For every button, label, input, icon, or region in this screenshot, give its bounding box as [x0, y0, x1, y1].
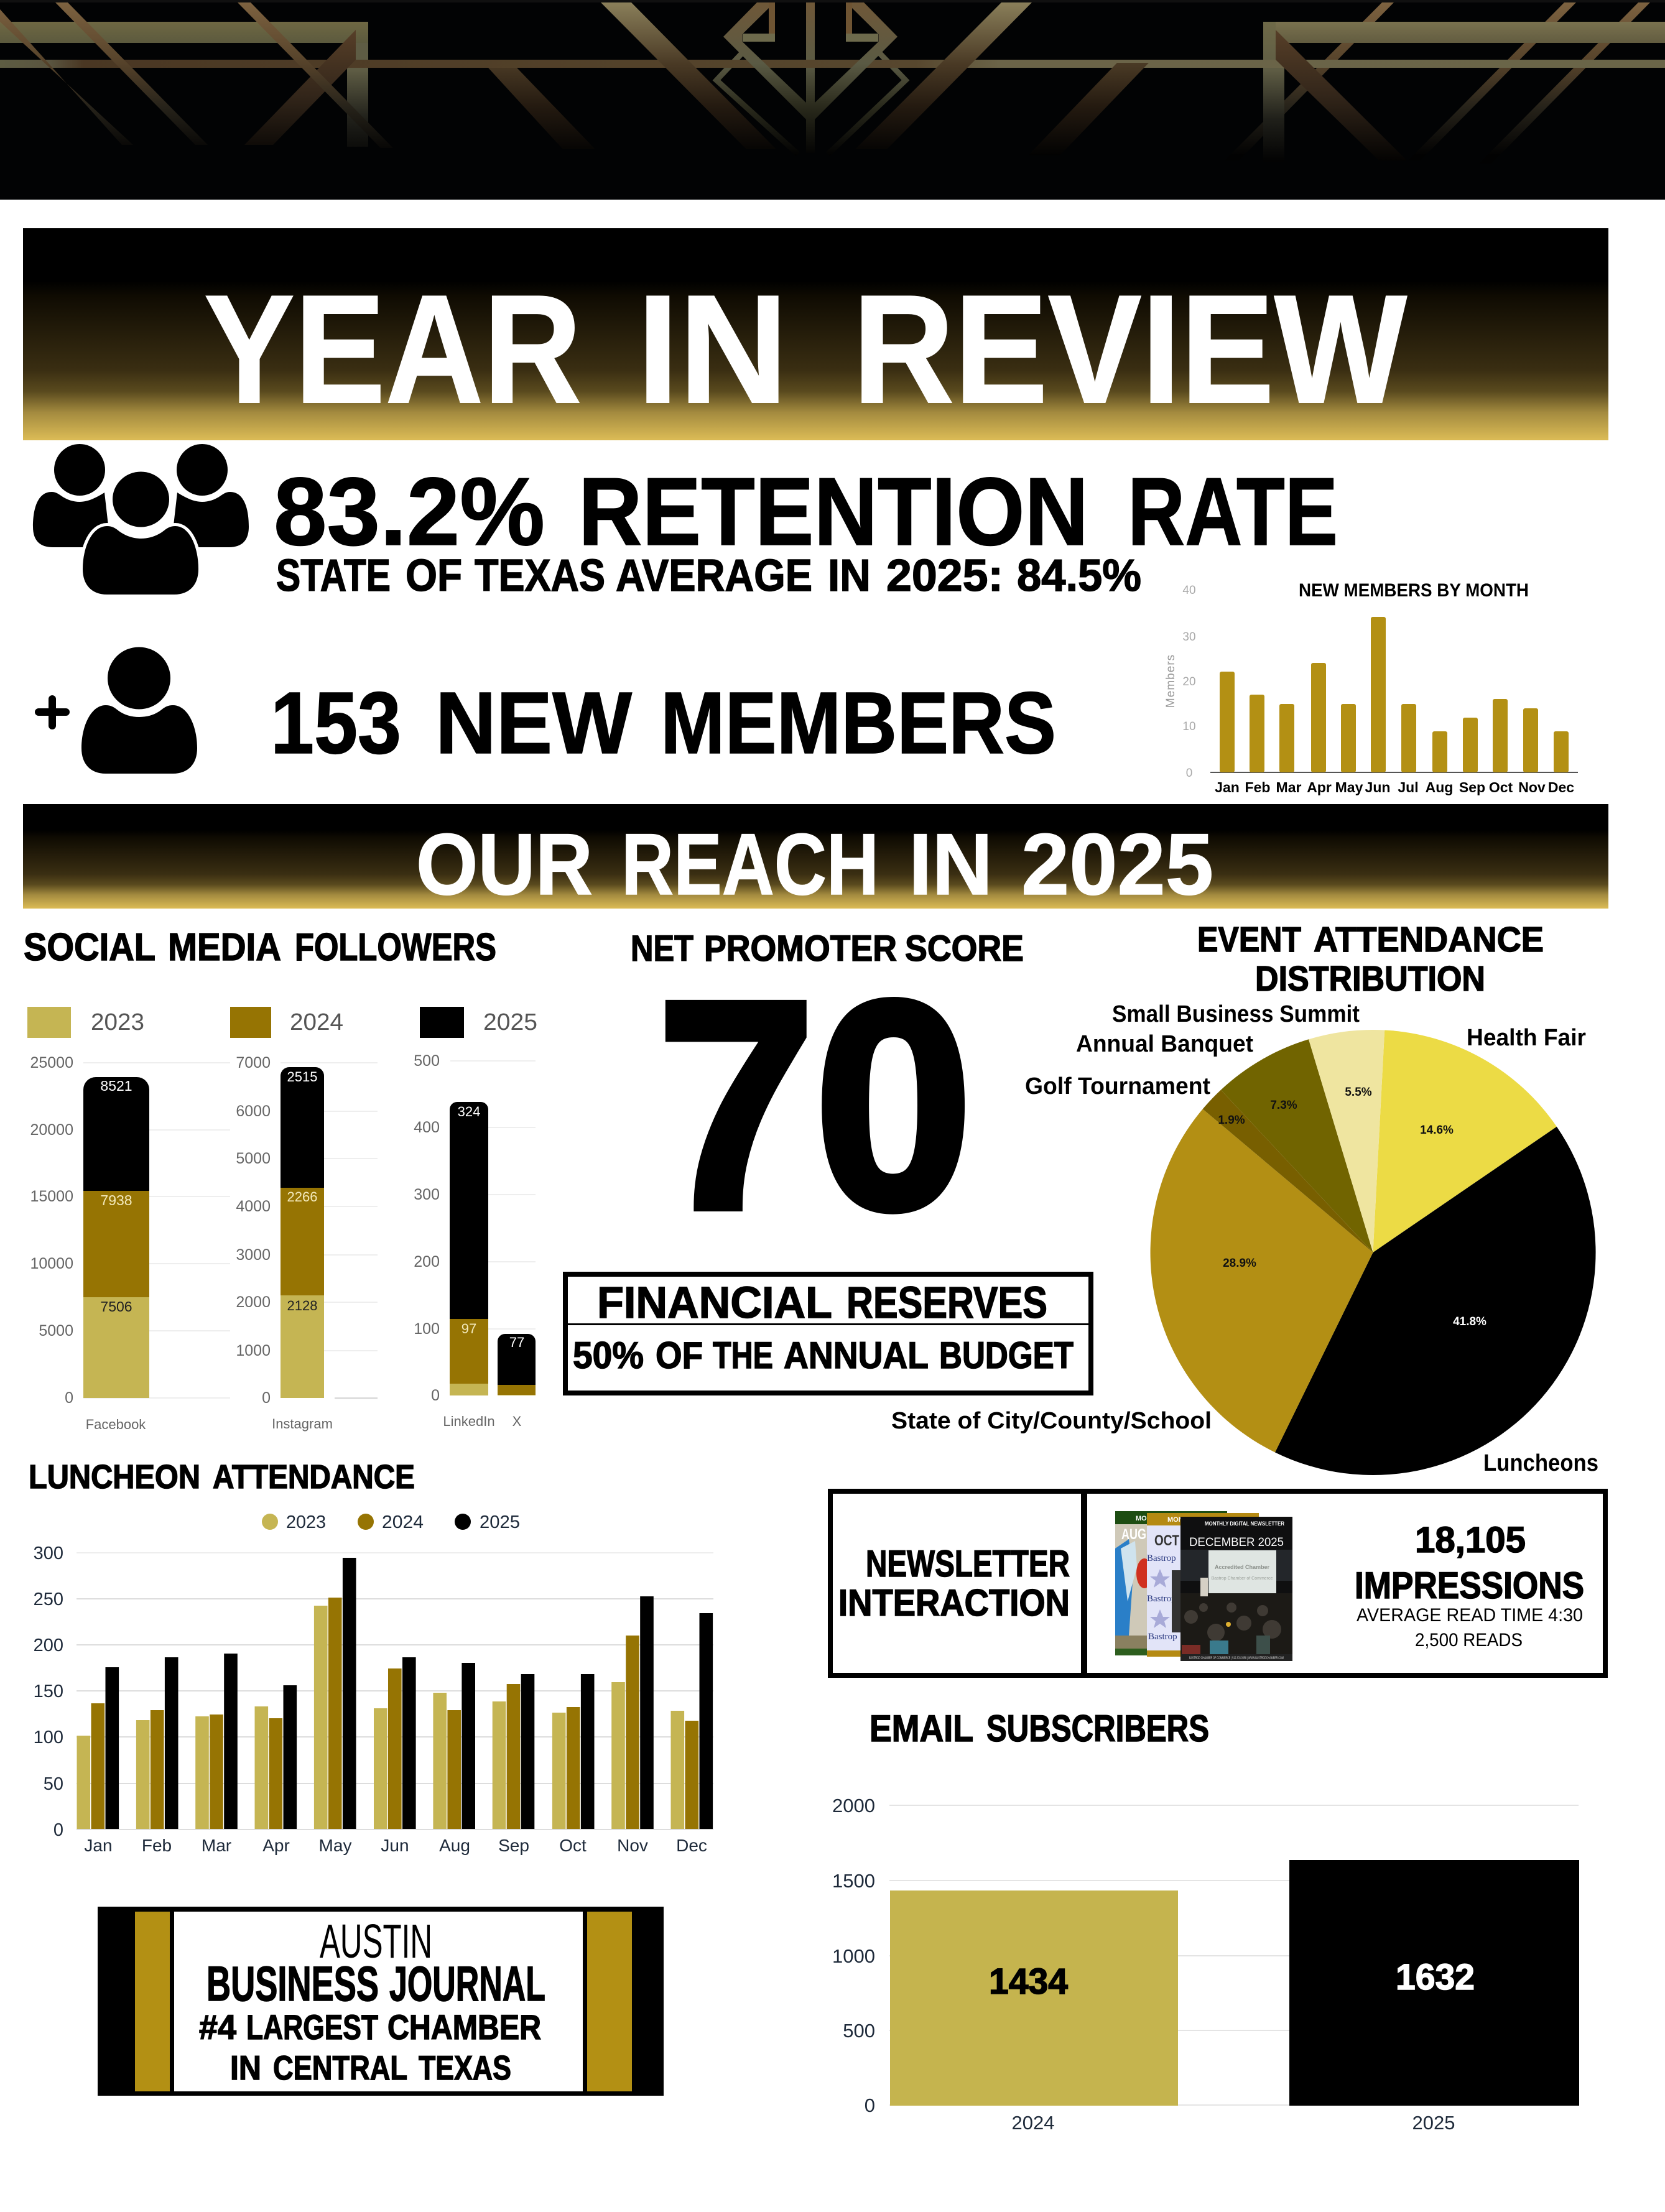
heading: luncheon attendance — [29, 1458, 415, 1496]
bar chart: new members by month: Feb — [1245, 779, 1270, 795]
impressions stat — [1355, 1520, 1584, 1650]
retention rate stat: RETENTION — [578, 458, 1088, 565]
bar chart: luncheon attendance: Jan — [84, 1836, 113, 1855]
bar chart: new members by month: Apr — [1307, 779, 1332, 795]
stacked bar chart: instagram: 2515 — [287, 1069, 317, 1085]
heading: net promoter score: NET — [631, 928, 693, 969]
bar chart: luncheon attendance: May — [319, 1836, 351, 1855]
bar chart: new members by month: 0 — [1186, 767, 1192, 780]
impressions stat: 2,500 READS — [1415, 1630, 1523, 1650]
big number: 70: 70 — [657, 941, 972, 1270]
stacked bar chart: instagram: 5000 — [236, 1150, 271, 1167]
title band: year in review: IN — [637, 262, 788, 435]
panel: financial reserves: BUDGET — [939, 1335, 1074, 1376]
bar chart: email subscribers: 1434 — [989, 1961, 1068, 2002]
bar chart: luncheon attendance: Oct — [559, 1836, 587, 1855]
new members stat — [271, 673, 1056, 772]
retention rate stat: 83.2% — [274, 458, 545, 565]
icon: three members — [33, 444, 249, 595]
bar chart: new members by month: Jan — [1215, 779, 1240, 795]
bar chart: luncheon attendance: 200 — [34, 1636, 63, 1655]
bar chart: new members by month: 40 — [1182, 584, 1196, 597]
panel: financial reserves: ANNUAL — [784, 1335, 929, 1376]
pie chart: event attendance: Golf Tournament — [1025, 1073, 1210, 1099]
bar chart: email subscribers: 2000 — [832, 1795, 875, 1816]
stacked bar chart: facebook: 20000 — [30, 1121, 73, 1139]
pie chart: event attendance: Health Fair — [1467, 1025, 1586, 1051]
newsletter covers: AUG — [1121, 1526, 1146, 1543]
texas average note — [276, 551, 1141, 601]
stacked bar chart: linkedin and x: 97 — [461, 1321, 476, 1336]
section band: our reach in 2025 — [23, 804, 1608, 913]
bar chart: new members by month: 10 — [1182, 720, 1196, 733]
stacked bar chart: linkedin and x: X — [512, 1414, 522, 1429]
stacked bar chart: instagram: 4000 — [236, 1198, 271, 1215]
newsletter covers: BASTROP CHAMBER OF COMMERCE | 512.303.0558 | WWW.BASTROPCHAMBER.COM — [1189, 1657, 1284, 1660]
chart title: NEW MEMBERS BY MONTH — [1299, 580, 1529, 601]
newsletter label — [838, 1543, 1070, 1624]
legend: 2025 — [480, 1512, 520, 1532]
newsletter covers: Bastrop — [1147, 1553, 1176, 1563]
newsletter covers: Bastrop Chamber of Commerce — [1212, 1576, 1273, 1581]
legend: 2023 — [286, 1512, 326, 1532]
bar chart: new members by month: Nov — [1518, 779, 1546, 795]
impressions stat: AVERAGE READ TIME 4:30 — [1357, 1605, 1583, 1626]
heading: net promoter score: SCORE — [905, 928, 1024, 969]
retention rate stat: RATE — [1128, 458, 1338, 565]
bar chart: email subscribers: 2025 — [1412, 2112, 1455, 2134]
stacked bar chart: instagram: 1000 — [236, 1342, 271, 1359]
heading: event attendance distribution — [1197, 920, 1544, 999]
callout: austin business journal: CENTRAL — [273, 2048, 407, 2087]
callout: austin business journal: JOURNAL — [389, 1956, 545, 2011]
bar chart: luncheon attendance: 150 — [34, 1682, 63, 1701]
stacked bar chart: linkedin and x: LinkedIn — [443, 1414, 495, 1429]
stacked bar chart: facebook: 0 — [65, 1389, 73, 1407]
bar chart: luncheon attendance: Nov — [617, 1836, 648, 1855]
newsletter label: NEWSLETTER — [866, 1543, 1070, 1585]
newsletter covers — [1115, 1511, 1292, 1661]
newsletter covers: Bastrop — [1147, 1594, 1176, 1604]
newsletter covers: OCT — [1154, 1532, 1179, 1549]
newsletter covers: DECEMBER 2025 — [1189, 1536, 1284, 1549]
bar chart: new members by month: Jul — [1398, 779, 1419, 795]
bar chart: email subscribers: 500 — [843, 2020, 875, 2042]
stacked bar chart: facebook: 7506 — [100, 1298, 132, 1315]
stacked bar chart: linkedin and x: 100 — [414, 1320, 440, 1338]
newsletter label: INTERACTION — [838, 1582, 1070, 1624]
bar chart: email subscribers: 1000 — [832, 1945, 875, 1967]
new members stat: MEMBERS — [661, 673, 1056, 772]
section band: our reach in 2025: OUR — [416, 815, 593, 913]
bar chart: new members by month: Members — [1164, 654, 1177, 708]
newsletter covers: Bastrop — [1148, 1632, 1177, 1642]
panel: financial reserves: RESERVES — [846, 1279, 1047, 1328]
retention rate stat — [274, 458, 1338, 565]
callout: austin business journal: IN — [230, 2048, 261, 2087]
stacked bar chart: instagram: Instagram — [272, 1416, 333, 1432]
bar chart: luncheon attendance: Sep — [498, 1836, 529, 1855]
stacked bar chart: linkedin and x: 300 — [414, 1186, 440, 1203]
impressions stat: 18,105 — [1415, 1520, 1526, 1560]
bar chart: luncheon attendance: 100 — [34, 1728, 63, 1747]
header banner: art deco lines — [0, 0, 1665, 200]
bar chart: luncheon attendance: Mar — [202, 1836, 231, 1855]
legend: social media years — [27, 1007, 537, 1038]
bar chart: luncheon attendance: Dec — [676, 1836, 707, 1855]
bar chart: email subscribers: 1500 — [832, 1870, 875, 1892]
panel: financial reserves — [565, 1274, 1091, 1393]
bar chart: email subscribers: 2024 — [1012, 2112, 1054, 2134]
stacked bar chart: linkedin and x — [414, 1052, 536, 1429]
stacked bar chart: instagram: 2000 — [236, 1293, 271, 1311]
heading: event attendance distribution: EVENT — [1197, 920, 1301, 960]
panel: financial reserves: THE — [713, 1335, 773, 1376]
bar chart: new members by month — [1164, 580, 1578, 795]
title band: year in review: REVIEW — [853, 262, 1407, 435]
impressions stat: IMPRESSIONS — [1355, 1565, 1584, 1606]
bar chart: email subscribers: 0 — [865, 2094, 875, 2116]
bar chart: email subscribers — [832, 1795, 1579, 2134]
heading: event attendance distribution: DISTRIBUTION — [1255, 959, 1485, 999]
bar chart: luncheon attendance: 0 — [53, 1820, 63, 1840]
heading: luncheon attendance: LUNCHEON — [29, 1458, 200, 1496]
callout: austin business journal: LARGEST — [246, 2007, 378, 2047]
callout: austin business journal: #4 — [199, 2007, 236, 2047]
pie chart: event attendance: Luncheons — [1483, 1450, 1598, 1476]
pie chart: event attendance: Annual Banquet — [1076, 1031, 1253, 1057]
bar chart: luncheon attendance: 250 — [34, 1590, 63, 1609]
legend: 2024 — [382, 1512, 424, 1532]
panel: financial reserves: 50% — [573, 1335, 644, 1376]
pie chart: event attendance: State of City/County/School — [891, 1408, 1212, 1434]
bar chart: new members by month: Oct — [1489, 779, 1513, 795]
newsletter covers: MON — [1136, 1515, 1152, 1522]
stacked bar chart: facebook: 15000 — [30, 1188, 73, 1205]
panel: financial reserves: OF — [656, 1335, 703, 1376]
heading: social media followers: FOLLOWERS — [295, 926, 496, 969]
bar chart: new members by month: Dec — [1548, 779, 1574, 795]
newsletter covers: MON — [1167, 1516, 1184, 1524]
bar chart: luncheon attendance: Apr — [262, 1836, 290, 1855]
panel: financial reserves: FINANCIAL — [597, 1279, 832, 1328]
pie chart: event attendance: 5.5% — [1345, 1086, 1372, 1099]
title band: year in review — [23, 228, 1608, 440]
callout: austin business journal — [98, 1907, 664, 2096]
stacked bar chart: facebook: 10000 — [30, 1255, 73, 1272]
stacked bar chart: linkedin and x: 400 — [414, 1119, 440, 1136]
pie chart: event attendance — [891, 1001, 1598, 1476]
legend — [262, 1512, 520, 1532]
stacked bar chart: instagram — [236, 1054, 378, 1432]
heading: email subscribers — [870, 1708, 1209, 1749]
pie chart: event attendance: 1.9% — [1218, 1114, 1245, 1127]
pie chart: event attendance: Small Business Summit — [1112, 1001, 1360, 1027]
stacked bar chart: instagram: 3000 — [236, 1246, 271, 1264]
bar chart: luncheon attendance: Feb — [142, 1836, 172, 1855]
heading: social media followers: MEDIA — [168, 926, 281, 969]
stacked bar chart: facebook: 8521 — [100, 1078, 132, 1094]
bar chart: new members by month: Aug — [1426, 779, 1453, 795]
stacked bar chart: facebook: Facebook — [86, 1417, 146, 1432]
stacked bar chart: instagram: 6000 — [236, 1103, 271, 1120]
texas average note: 2025: — [886, 551, 1003, 601]
bar chart: new members by month: Sep — [1459, 779, 1485, 795]
bar chart: new members by month: May — [1335, 779, 1363, 795]
stacked bar chart: instagram: 0 — [262, 1389, 271, 1407]
callout: austin business journal: TEXAS — [419, 2048, 511, 2087]
stacked bar chart: instagram: 7000 — [236, 1054, 271, 1071]
heading: social media followers — [24, 926, 496, 969]
section band: our reach in 2025: REACH — [621, 815, 879, 913]
stacked bar chart: linkedin and x: 200 — [414, 1253, 440, 1270]
heading: email subscribers: EMAIL — [870, 1708, 973, 1749]
legend: social media years: 2025 — [483, 1009, 537, 1035]
newsletter covers: Accredited Chamber — [1215, 1564, 1270, 1570]
bar chart: luncheon attendance: Aug — [439, 1836, 470, 1855]
stacked bar chart: facebook: 7938 — [100, 1192, 132, 1208]
bar chart: email subscribers: 1632 — [1396, 1957, 1475, 1997]
stacked bar chart: facebook: 5000 — [39, 1322, 73, 1340]
callout: austin business journal: AUSTIN — [320, 1915, 432, 1968]
title band: year in review: YEAR — [204, 262, 582, 435]
texas average note: 84.5% — [1017, 551, 1141, 601]
pie chart: event attendance: 14.6% — [1420, 1124, 1454, 1137]
pie chart: event attendance: 28.9% — [1223, 1257, 1256, 1270]
bar chart: new members by month: Mar — [1276, 779, 1301, 795]
texas average note: STATE — [276, 551, 391, 601]
pie chart: event attendance: 7.3% — [1270, 1099, 1297, 1112]
heading: email subscribers: SUBSCRIBERS — [986, 1708, 1209, 1749]
bar chart: new members by month: 20 — [1182, 675, 1196, 688]
bar chart: luncheon attendance: 300 — [34, 1543, 63, 1563]
stacked bar chart: linkedin and x: 324 — [458, 1104, 480, 1119]
legend: social media years: 2023 — [91, 1009, 144, 1035]
stacked bar chart: facebook — [30, 1054, 230, 1432]
section band: our reach in 2025: IN — [909, 815, 993, 913]
section band: our reach in 2025: 2025 — [1021, 815, 1213, 913]
stacked bar chart: instagram: 2128 — [287, 1298, 317, 1313]
right side lines behind bars — [1225, 2, 1650, 164]
newsletter covers: MONTHLY DIGITAL NEWSLETTER — [1205, 1520, 1284, 1527]
stacked bar chart: linkedin and x: 77 — [509, 1335, 524, 1350]
texas average note: OF — [406, 551, 462, 601]
stacked bar chart: instagram: 2266 — [287, 1189, 317, 1205]
heading: event attendance distribution: ATTENDANCE — [1314, 920, 1544, 960]
texas average note: TEXAS — [475, 551, 605, 601]
heading: net promoter score — [631, 928, 1024, 969]
stacked bar chart: linkedin and x: 500 — [414, 1052, 440, 1070]
heading: luncheon attendance: ATTENDANCE — [213, 1458, 415, 1496]
texas average note: IN — [828, 551, 871, 601]
bar chart: luncheon attendance — [34, 1512, 713, 1855]
callout: austin business journal: BUSINESS — [206, 1956, 379, 2011]
heading: net promoter score: PROMOTER — [704, 928, 897, 969]
pie chart: event attendance: 41.8% — [1453, 1315, 1486, 1328]
bar chart: new members by month: 30 — [1182, 631, 1196, 644]
icon: new member plus — [35, 647, 197, 774]
bar chart: luncheon attendance: Jun — [381, 1836, 409, 1855]
new members stat: NEW — [435, 673, 632, 772]
legend: social media years: 2024 — [290, 1009, 343, 1035]
stacked bar chart: linkedin and x: 0 — [431, 1387, 440, 1404]
texas average note: AVERAGE — [616, 551, 812, 601]
new members stat: 153 — [271, 673, 401, 772]
bar chart: new members by month: Jun — [1365, 779, 1390, 795]
heading: social media followers: SOCIAL — [24, 926, 155, 969]
panel: newsletter interaction — [830, 1491, 1605, 1675]
bar chart: luncheon attendance: 50 — [44, 1774, 63, 1794]
stacked bar chart: facebook: 25000 — [30, 1054, 73, 1071]
callout: austin business journal: CHAMBER — [387, 2007, 541, 2047]
